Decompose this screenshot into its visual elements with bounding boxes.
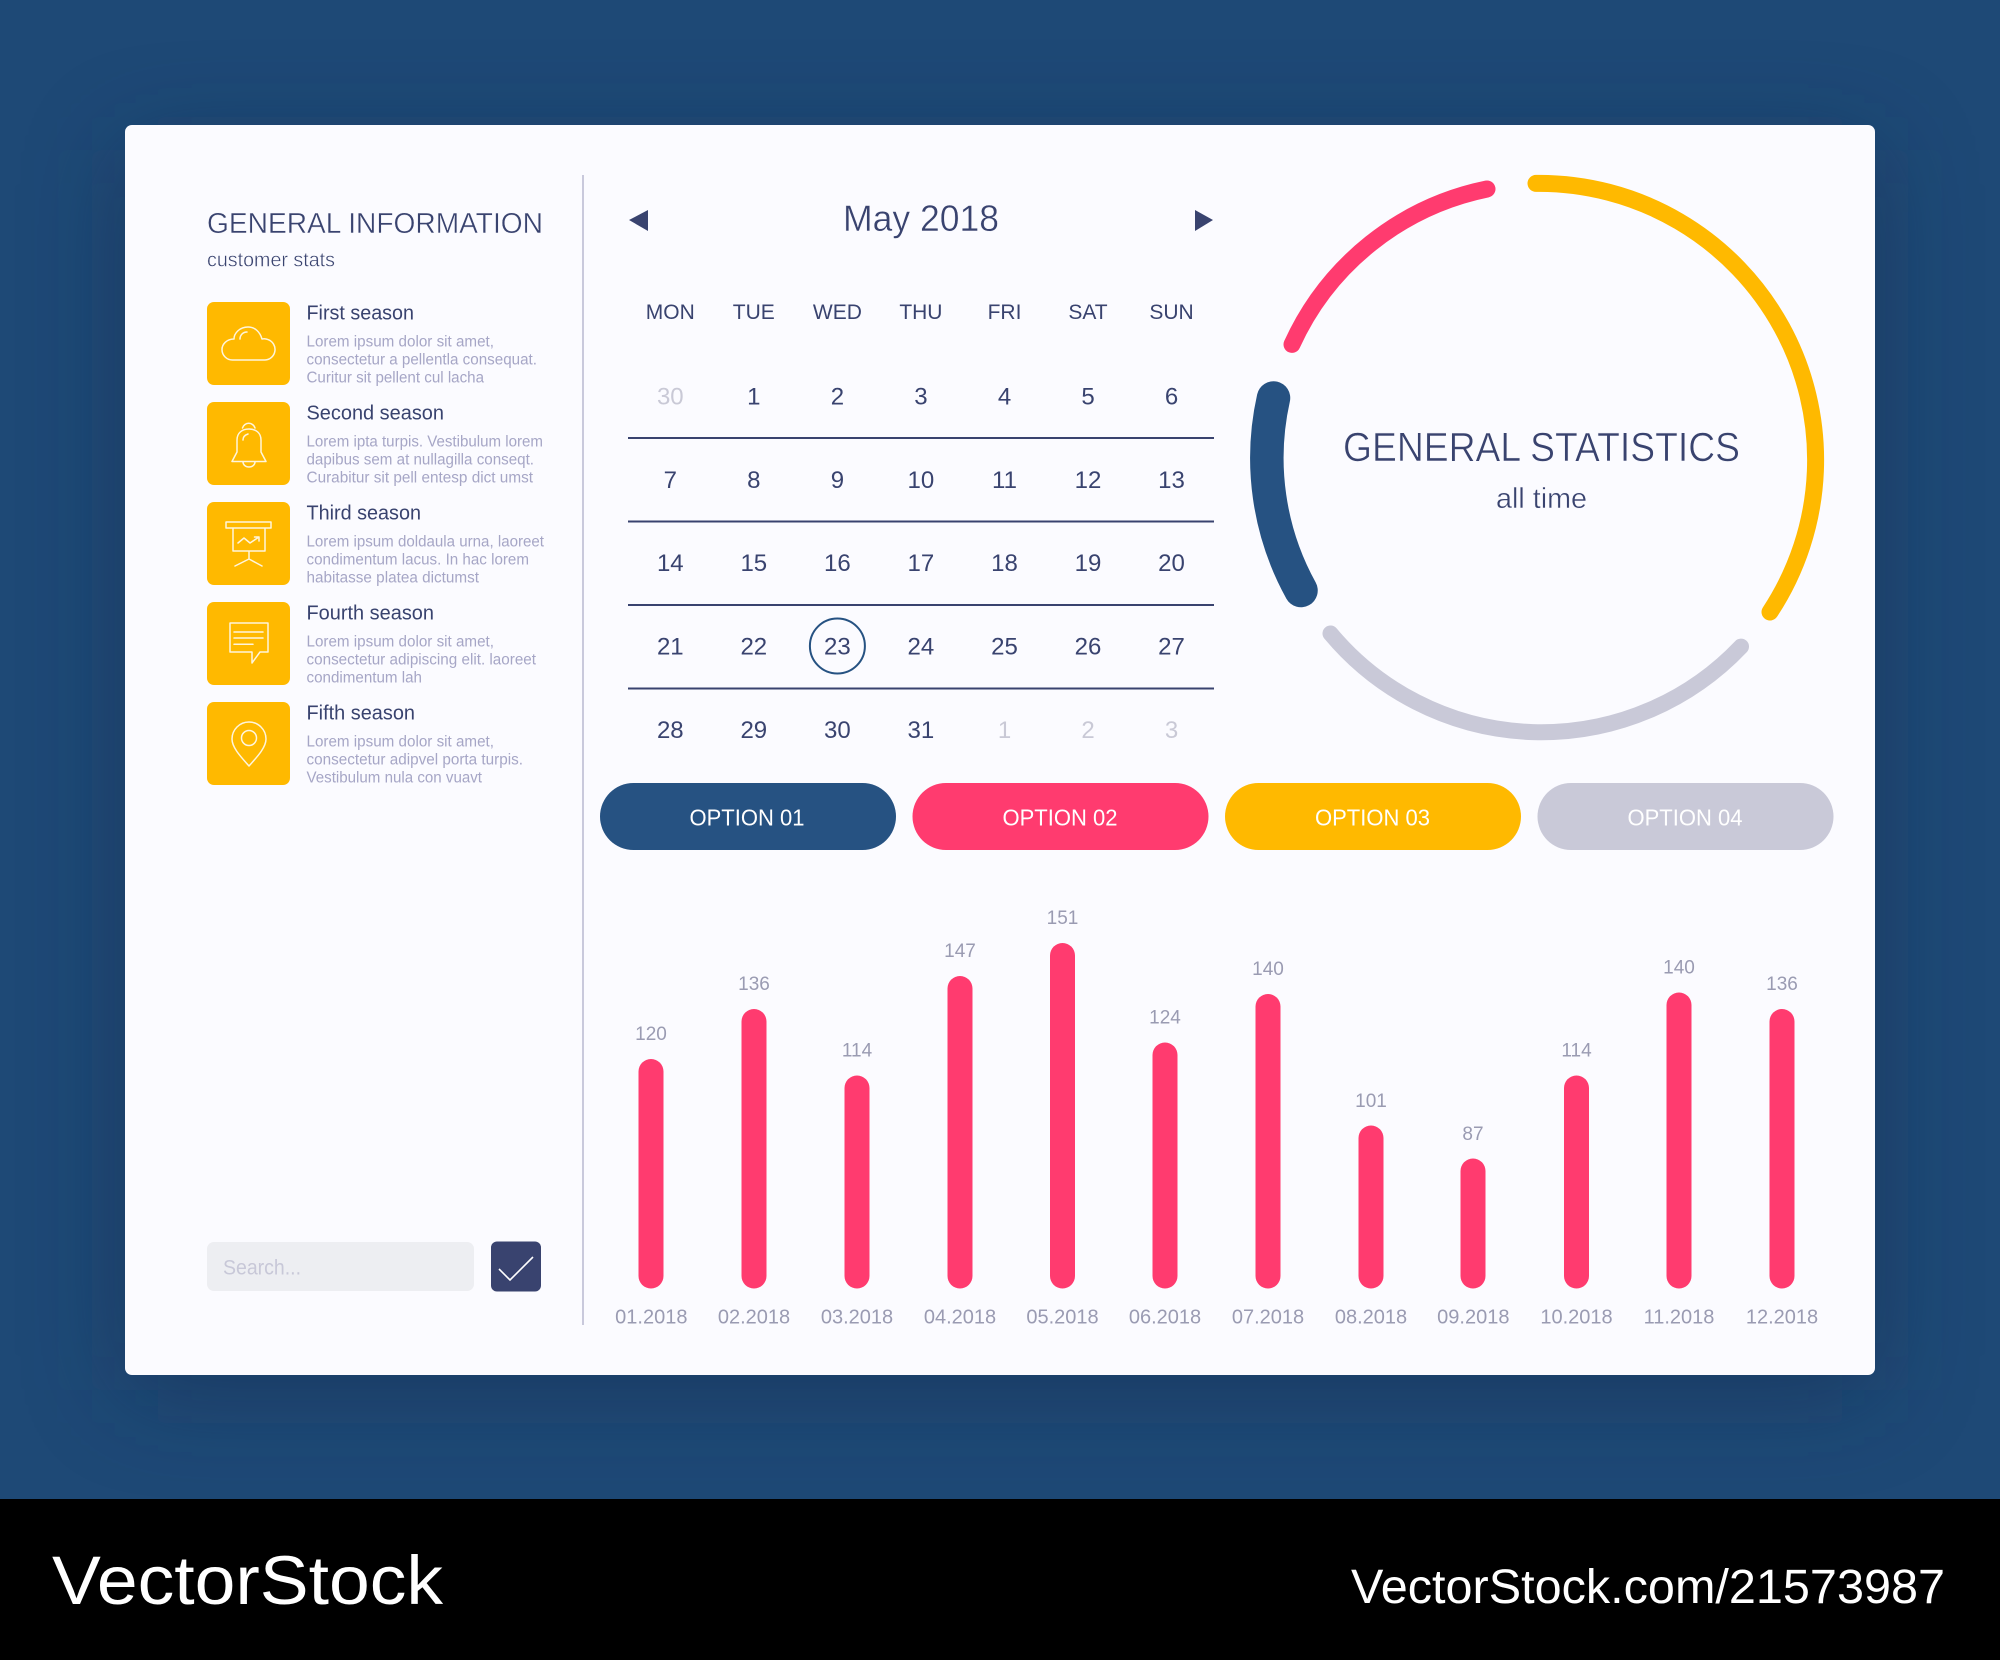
weekday headers: WED: [813, 301, 862, 324]
week 4: 24: [908, 634, 934, 660]
month labels: 06.2018: [1129, 1306, 1201, 1328]
watermark logo: VectorStock: [52, 1542, 444, 1619]
panel: general statistics ring: [1267, 183, 1816, 732]
panel: calendar: [628, 198, 1214, 744]
item: fourth season: [207, 602, 537, 686]
item: fourth season: condimentum lah: [306, 670, 422, 686]
item: third season: Lorem ipsum doldaula urna, laoreet: [306, 534, 545, 550]
item: fifth season: Vestibulum nula con vuavt: [306, 770, 483, 786]
week 5: 2: [1081, 717, 1095, 744]
month labels: 09.2018: [1437, 1306, 1509, 1328]
heading: GENERAL INFORMATION: [207, 208, 543, 240]
week 3: 17: [908, 550, 934, 577]
weekday headers: MON: [646, 301, 695, 324]
month labels: 02.2018: [718, 1306, 790, 1328]
week 4: [657, 634, 1185, 660]
week 2: 9: [831, 467, 844, 494]
icon: bell: [207, 402, 290, 485]
icon: checkbox: [491, 1242, 541, 1292]
week 3: 16: [824, 550, 851, 577]
search box: [207, 1242, 474, 1291]
arc: navy: [1267, 398, 1301, 590]
icon: speech bubble: [207, 602, 290, 685]
card shadow: [125, 150, 1875, 1390]
icon: next arrow: [1195, 210, 1213, 231]
bars: [638, 943, 1794, 1288]
weekday headers: SUN: [1149, 301, 1194, 324]
week 4: 26: [1075, 634, 1101, 660]
week 1: [657, 384, 1178, 410]
item: first season: First season: [306, 302, 414, 324]
icon: previous arrow: [629, 210, 648, 231]
item: second season: Lorem ipta turpis. Vestibulum lorem: [306, 434, 543, 450]
week 1: 3: [914, 384, 928, 410]
arc: pink: [1292, 189, 1487, 344]
row dividers: [628, 437, 1214, 690]
bar values: 140: [1252, 959, 1284, 980]
search box: Search...: [223, 1256, 301, 1280]
bar values: 140: [1663, 958, 1695, 978]
bar chart: [615, 908, 1818, 1328]
bar values: 101: [1355, 1091, 1387, 1112]
week 4: 25: [991, 634, 1018, 660]
week 2: 11: [992, 467, 1017, 494]
item: first season: consectetur a pellentla consequat.: [306, 352, 537, 368]
weekday headers: THU: [899, 301, 942, 324]
watermark url: VectorStock.com/21573987: [1351, 1561, 1945, 1614]
item: fourth season: Lorem ipsum dolor sit amet,: [306, 634, 494, 650]
week 5: [657, 717, 1178, 744]
bar values: [635, 908, 1798, 1145]
ring subtitle: all time: [1496, 483, 1587, 515]
week 2: [664, 467, 1185, 494]
month labels: 07.2018: [1232, 1306, 1304, 1328]
bar values: 124: [1149, 1008, 1181, 1028]
button: option 02: [912, 783, 1208, 850]
week 1: 30: [657, 384, 684, 410]
week 4: 21: [657, 634, 684, 660]
button: option 03: [1225, 783, 1521, 850]
week 4: 23: [824, 634, 851, 660]
item: second season: [207, 402, 543, 486]
icon: presentation board: [207, 502, 290, 585]
bar values: 114: [1561, 1040, 1592, 1062]
week 5: 1: [998, 717, 1011, 744]
panel: general information: [207, 208, 545, 1292]
week 2: 13: [1158, 467, 1185, 494]
item: fourth season: consectetur adipiscing elit. laoreet: [306, 652, 537, 668]
week 5: 30: [824, 717, 851, 744]
bar values: 87: [1462, 1124, 1484, 1145]
item: second season: dapibus sem at nullagilla conseqt.: [306, 452, 534, 468]
bar values: 136: [1766, 974, 1798, 995]
month labels: 03.2018: [821, 1306, 893, 1328]
item: third season: condimentum lacus. In hac lorem: [306, 552, 529, 568]
sidebar divider: [582, 175, 584, 1325]
item: first season: Lorem ipsum dolor sit amet,: [306, 334, 494, 350]
week 1: 2: [831, 384, 844, 410]
item: second season: Second season: [306, 402, 444, 424]
month labels: 05.2018: [1026, 1306, 1099, 1328]
week 5: 3: [1165, 717, 1178, 744]
weekday headers: SAT: [1068, 301, 1108, 324]
week 1: 5: [1081, 384, 1095, 410]
button: option 02: OPTION 02: [1002, 804, 1118, 830]
calendar title: May 2018: [843, 198, 999, 239]
item: third season: [207, 502, 545, 586]
arc: grey: [1330, 634, 1741, 732]
month labels: [615, 1306, 1818, 1328]
month labels: 12.2018: [1746, 1306, 1818, 1328]
week 1: 1: [747, 384, 760, 410]
bar values: 151: [1047, 908, 1078, 929]
item: fifth season: [207, 702, 523, 786]
week 3: 18: [991, 550, 1018, 577]
icon: cloud: [207, 302, 290, 385]
arc: yellow: [1536, 183, 1816, 612]
button: option 04: [1538, 783, 1834, 850]
week 3: 19: [1075, 550, 1101, 577]
weekday headers: [646, 301, 1194, 324]
panel: dashboard card: [125, 125, 1875, 1375]
item: first season: Curitur sit pellent cul lacha: [306, 370, 484, 386]
icon: map pin: [207, 702, 290, 785]
ring title: GENERAL STATISTICS: [1343, 424, 1740, 470]
week 5: 28: [657, 717, 684, 744]
footer watermark bar: [0, 1499, 2000, 1660]
item: first season: [207, 302, 537, 386]
week 3: 14: [657, 550, 684, 577]
week 5: 31: [908, 717, 934, 744]
button: option 01: OPTION 01: [690, 804, 804, 830]
button: option 03: OPTION 03: [1315, 804, 1430, 830]
bar values: 120: [635, 1024, 667, 1045]
week 3: 15: [740, 550, 767, 577]
week 1: 6: [1165, 384, 1178, 410]
item: fifth season: Lorem ipsum dolor sit amet,: [306, 734, 494, 750]
item: fifth season: Fifth season: [306, 702, 415, 724]
bar values: 114: [842, 1040, 873, 1062]
weekday headers: FRI: [988, 301, 1021, 324]
month labels: 11.2018: [1644, 1306, 1714, 1328]
month labels: 10.2018: [1540, 1306, 1613, 1328]
month labels: 04.2018: [924, 1306, 996, 1328]
item: third season: Third season: [306, 502, 421, 524]
week 2: 10: [908, 467, 934, 494]
today marker: [810, 618, 865, 674]
weekday headers: TUE: [733, 301, 775, 324]
week 1: 4: [998, 384, 1011, 410]
week 2: 8: [747, 467, 760, 494]
item: fourth season: Fourth season: [306, 602, 434, 624]
week 3: 20: [1158, 550, 1185, 577]
item: third season: habitasse platea dictumst: [306, 570, 480, 586]
item: fifth season: consectetur adipvel porta turpis.: [306, 752, 523, 768]
week 4: 22: [740, 634, 767, 660]
item: second season: Curabitur sit pell entesp dict umst: [306, 470, 534, 486]
option buttons: [600, 783, 1834, 850]
bar values: 136: [738, 974, 770, 995]
month labels: 01.2018: [615, 1306, 687, 1328]
subheading: customer stats: [207, 250, 335, 272]
month labels: 08.2018: [1335, 1306, 1407, 1328]
week 2: 7: [664, 467, 677, 494]
button: option 01: [600, 783, 896, 850]
week 3: [657, 550, 1185, 577]
week 4: 27: [1158, 634, 1185, 660]
bar values: 147: [944, 941, 976, 962]
week 2: 12: [1075, 467, 1101, 494]
week 5: 29: [740, 717, 767, 744]
button: option 04: OPTION 04: [1628, 804, 1743, 830]
